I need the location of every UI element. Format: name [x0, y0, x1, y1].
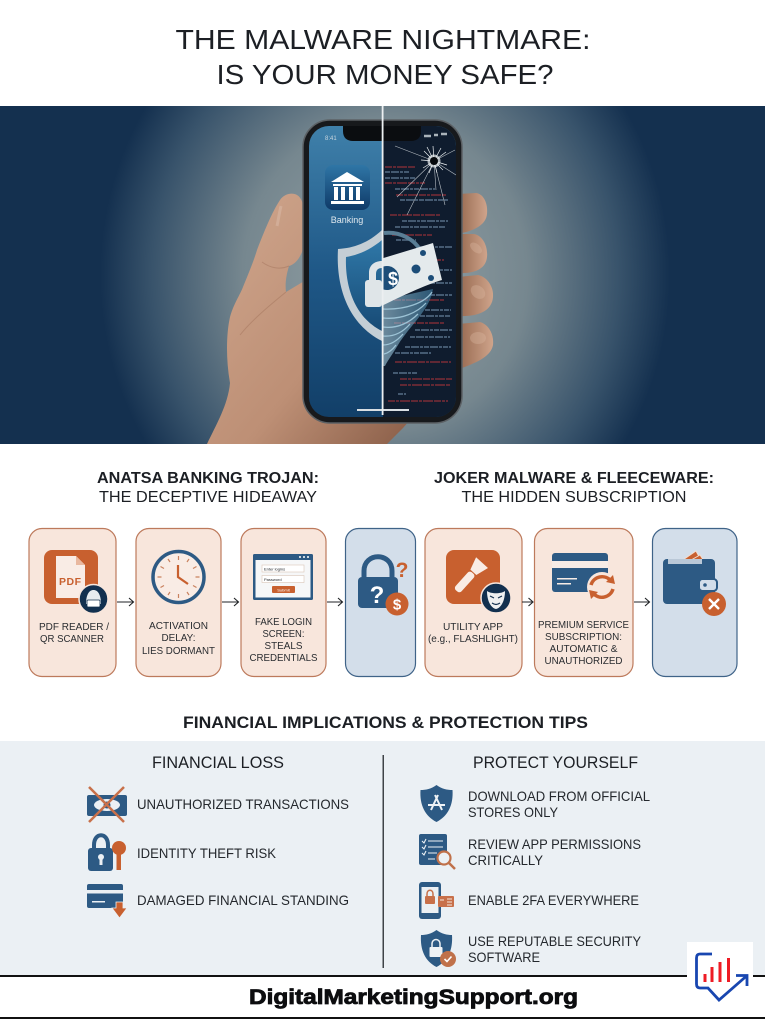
card: activation delay: DELAY: [162, 632, 196, 644]
card: fake login screen: FAKE LOGIN [255, 616, 312, 628]
banking app icon [325, 165, 370, 225]
column: financial loss: FINANCIAL LOSS [152, 753, 284, 772]
hand palm and thumb [207, 194, 410, 444]
card: utility app: UTILITY APP [443, 621, 503, 633]
notch and status: 8:41 [325, 136, 337, 142]
item: security software [421, 930, 642, 967]
arrow [222, 598, 238, 606]
item: official stores: DOWNLOAD FROM OFFICIAL [468, 788, 650, 804]
phone screen right: malware code [383, 126, 457, 418]
title: THE MALWARE NIGHTMARE: [176, 24, 590, 55]
section: Joker heading: THE HIDDEN SUBSCRIPTION [462, 489, 686, 506]
card: activation delay: LIES DORMANT [142, 645, 216, 657]
card: premium subscription: SUBSCRIPTION: [545, 631, 622, 643]
card: activation delay: ACTIVATION [149, 620, 208, 632]
card: locked account outcome: ? [370, 582, 384, 609]
card: empty wallet outcome [652, 528, 737, 676]
item: unauthorized transactions: UNAUTHORIZED TRANSACTIONS [137, 796, 349, 812]
card: utility app [425, 528, 522, 676]
card: fake login screen: SCREEN: [262, 628, 304, 640]
banking app icon: Banking [331, 215, 363, 225]
section: Joker heading [434, 470, 714, 506]
card: premium subscription [534, 528, 633, 676]
arrow [634, 598, 650, 606]
card: PDF reader / QR scanner: PDF READER / [39, 621, 109, 633]
card: fake login screen: Password [264, 577, 282, 582]
item: enable 2FA: ENABLE 2FA EVERYWHERE [468, 892, 639, 908]
banknote [384, 243, 442, 305]
arrow [327, 598, 342, 606]
item: damaged standing [87, 884, 349, 918]
card: PDF reader / QR scanner: PDF [59, 576, 82, 588]
item: app permissions: CRITICALLY [468, 852, 544, 868]
card: fake login screen: STEALS [264, 640, 302, 652]
card: premium subscription: UNAUTHORIZED [544, 655, 623, 667]
arrow [522, 598, 533, 606]
card: fake login screen: Submit [277, 588, 291, 592]
column: financial loss [87, 753, 349, 918]
item: enable 2FA [419, 882, 639, 919]
card: utility app: (e.g., FLASHLIGHT) [428, 633, 518, 645]
card: locked account outcome: ? [396, 559, 408, 582]
item: security software: SOFTWARE [468, 949, 540, 965]
section: Anatsa heading: ANATSA BANKING TROJAN: [97, 470, 319, 487]
item: app permissions [419, 834, 641, 869]
card: fake login screen: CREDENTIALS [250, 652, 318, 664]
item: security software: USE REPUTABLE SECURITY [468, 933, 642, 949]
panel: financial implications and protection tips [0, 741, 765, 976]
item: official stores: STORES ONLY [468, 804, 559, 820]
cracked glass [395, 146, 456, 215]
notch and status [325, 126, 447, 142]
section heading: financial implications: FINANCIAL IMPLICATIONS & PROTECTION TIPS [183, 713, 588, 732]
item: damaged standing: DAMAGED FINANCIAL STANDING [137, 892, 349, 908]
shield with lock [338, 230, 382, 341]
item: unauthorized transactions [87, 787, 349, 822]
card: fake login screen [241, 528, 326, 676]
column: protect yourself: PROTECT YOURSELF [473, 753, 638, 772]
phone body [303, 120, 462, 423]
title: IS YOUR MONEY SAFE? [216, 59, 554, 90]
card: PDF reader / QR scanner: QR SCANNER [40, 633, 104, 645]
section: Joker heading: JOKER MALWARE & FLEECEWARE: [434, 470, 714, 487]
fingers [458, 193, 493, 368]
card: activation delay [136, 528, 221, 676]
card: locked account outcome [346, 528, 416, 676]
title [176, 24, 590, 90]
card: premium subscription: PREMIUM SERVICE [538, 619, 629, 631]
white split line [382, 106, 384, 415]
item: app permissions: REVIEW APP PERMISSIONS [468, 836, 641, 852]
card: PDF reader / QR scanner [29, 528, 116, 676]
footer rules [0, 975, 765, 1019]
hero illustration: hand holding phone [0, 106, 765, 444]
card: locked account outcome: $ [393, 596, 402, 614]
item: identity theft [88, 835, 277, 871]
tornado [383, 233, 433, 366]
card: fake login screen: Enter logins [264, 566, 285, 572]
footer website text: DigitalMarketingSupport.org [249, 986, 578, 1009]
arrow [117, 598, 134, 606]
logo [687, 942, 753, 1008]
home bar [357, 409, 409, 411]
item: official stores [420, 785, 650, 822]
item: identity theft: IDENTITY THEFT RISK [137, 845, 277, 861]
card: premium subscription: AUTOMATIC & [550, 643, 618, 655]
section: Anatsa heading [97, 470, 319, 506]
column: protect yourself [419, 753, 650, 967]
section: Anatsa heading: THE DECEPTIVE HIDEAWAY [99, 489, 317, 506]
phone screen left [309, 126, 456, 417]
banknote: $ [388, 269, 398, 289]
